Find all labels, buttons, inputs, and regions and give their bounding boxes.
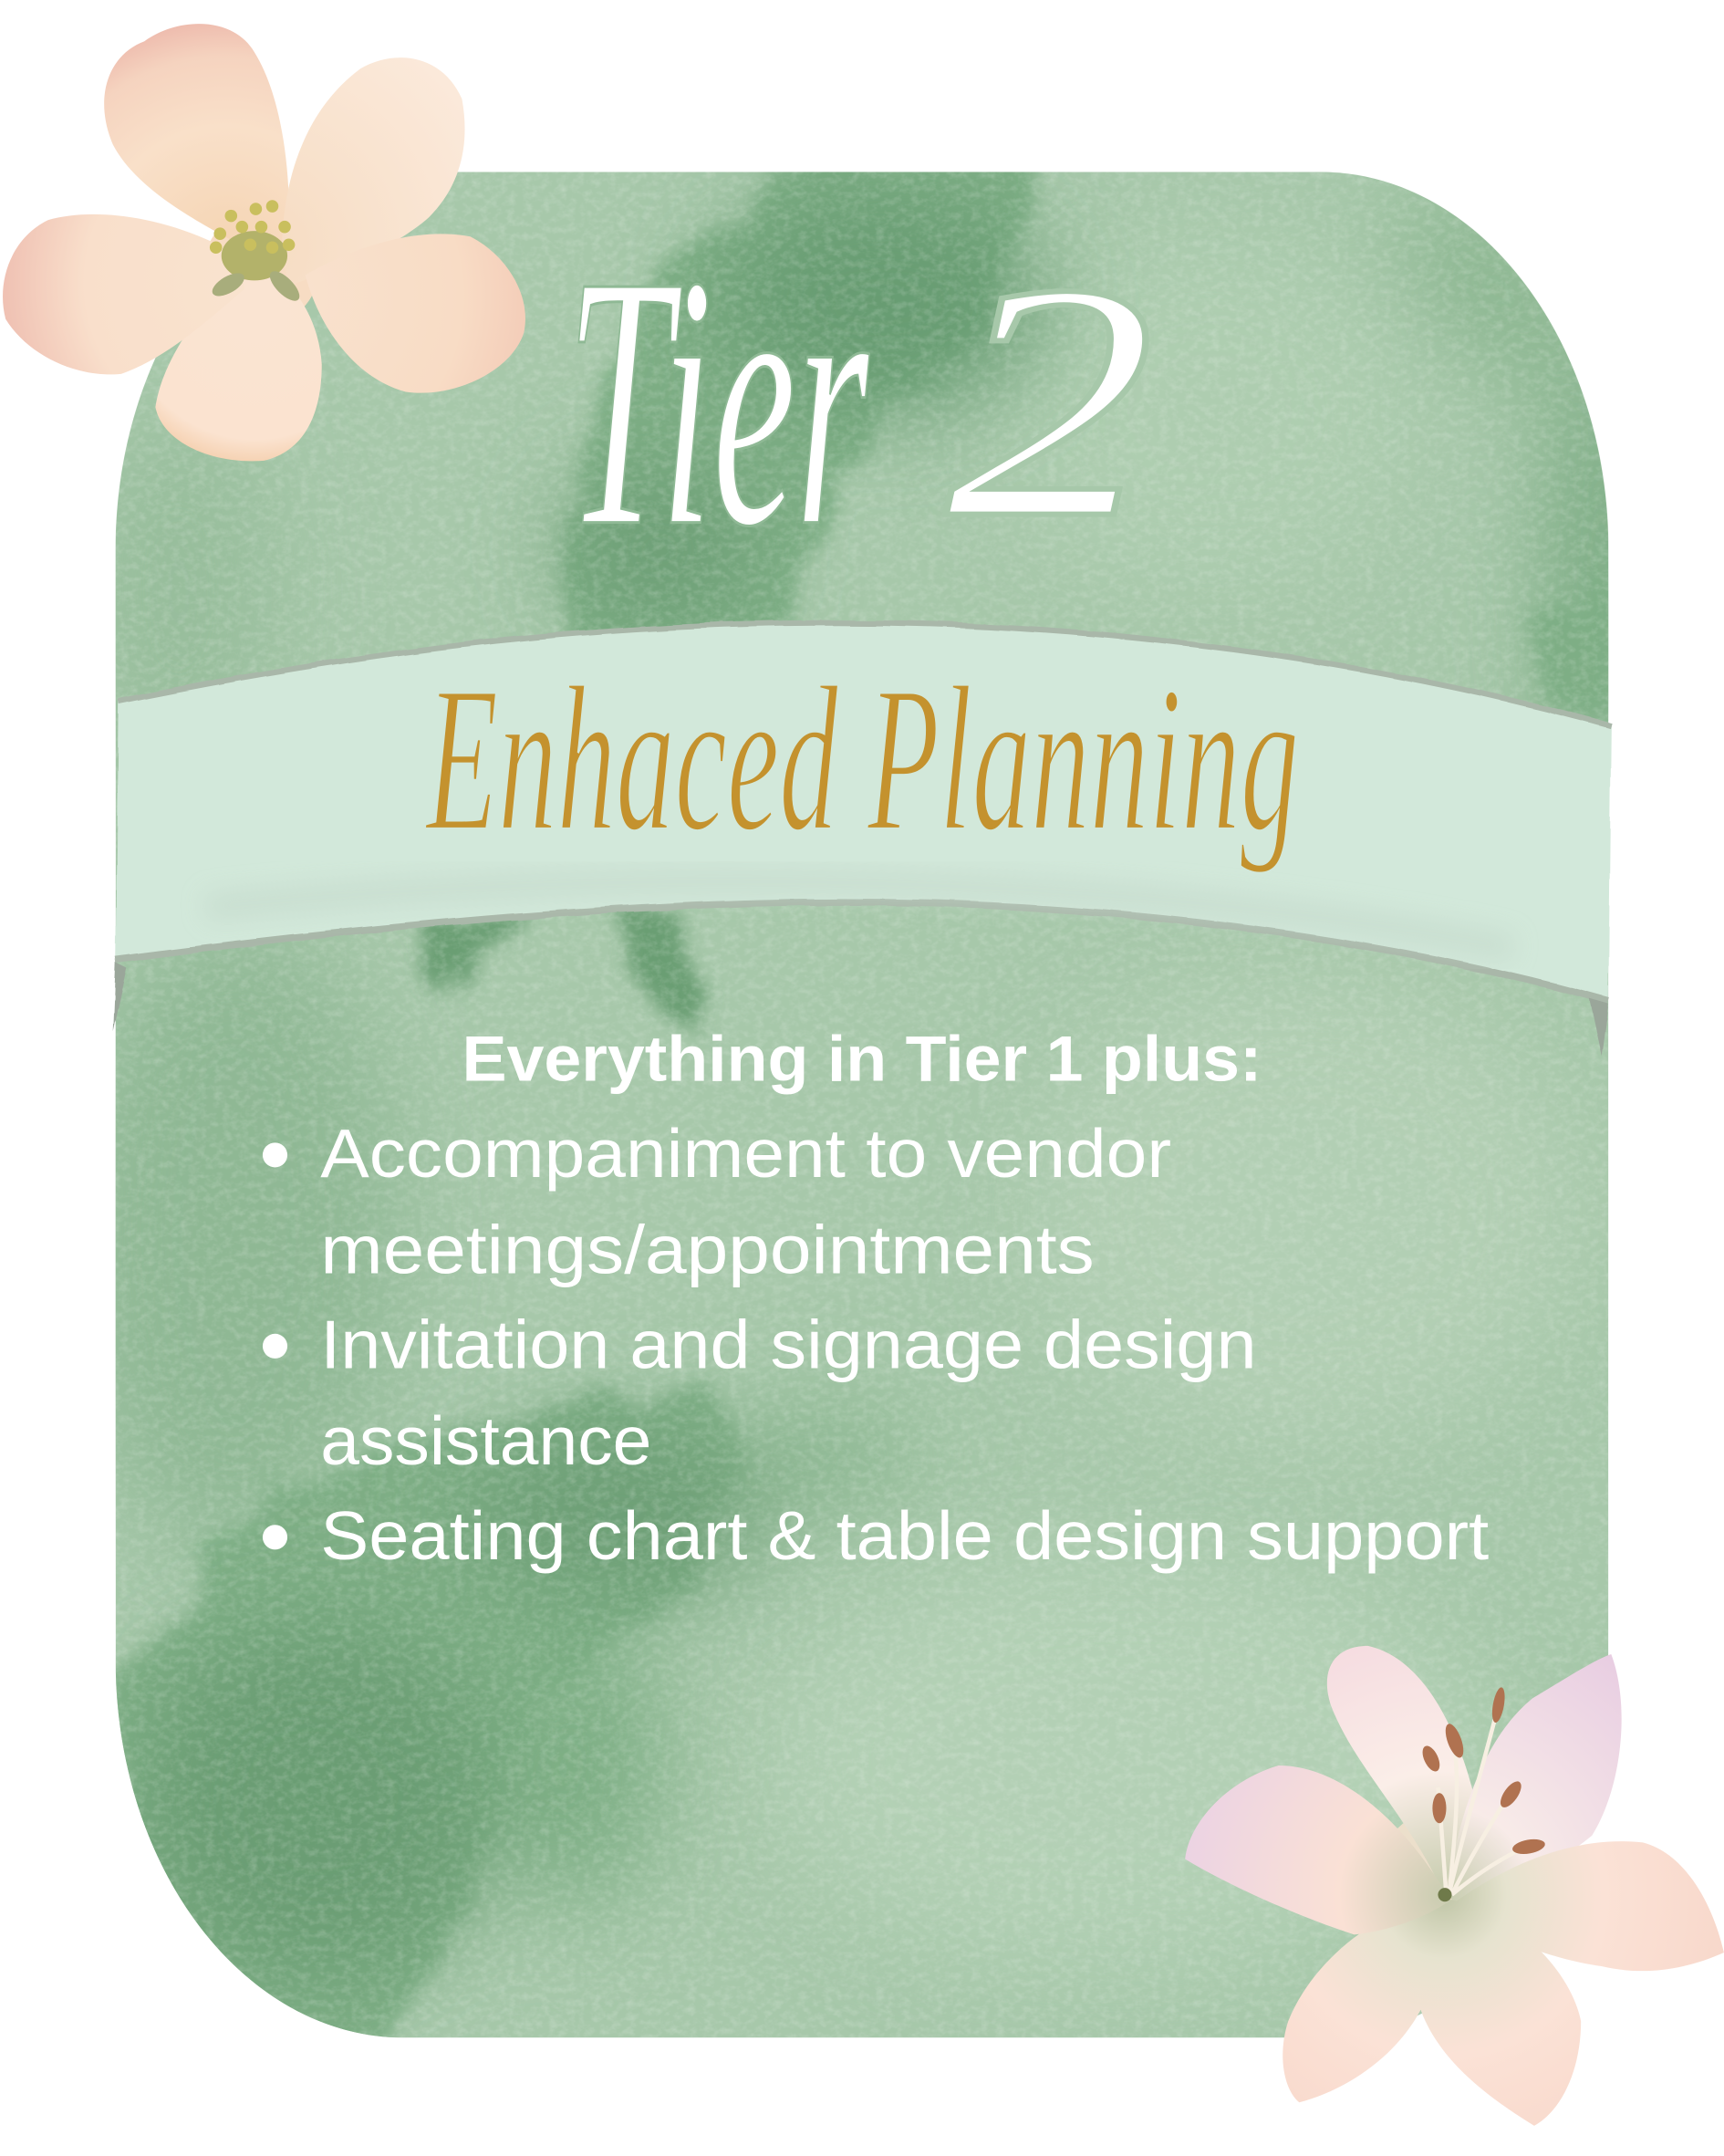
title: Tier 2: Tier — [566, 203, 872, 601]
text block: feature list — [263, 1024, 1489, 1574]
bullet: invitation design: assistance — [320, 1402, 651, 1479]
bullet: seating chart: Seating chart & table design support — [320, 1497, 1489, 1574]
bullet: vendor meetings: meetings/appointments — [320, 1211, 1095, 1287]
bullet: vendor meetings: Accompaniment to vendor — [320, 1115, 1171, 1192]
icon: pink lily flower — [1185, 1646, 1724, 2126]
icon: peach blossom flower — [3, 24, 525, 461]
bullet: vendor meetings — [263, 1115, 1171, 1287]
bullet: invitation design — [263, 1306, 1257, 1479]
title: Tier 2: 2 — [946, 214, 1155, 588]
flower stamens — [209, 200, 304, 306]
bullet: invitation design: Invitation and signage design — [320, 1306, 1257, 1382]
banner: pale green ribbon — [113, 623, 1611, 1056]
lily stamens — [1419, 1686, 1546, 1901]
list heading: Everything in Tier 1 plus: — [462, 1024, 1262, 1096]
